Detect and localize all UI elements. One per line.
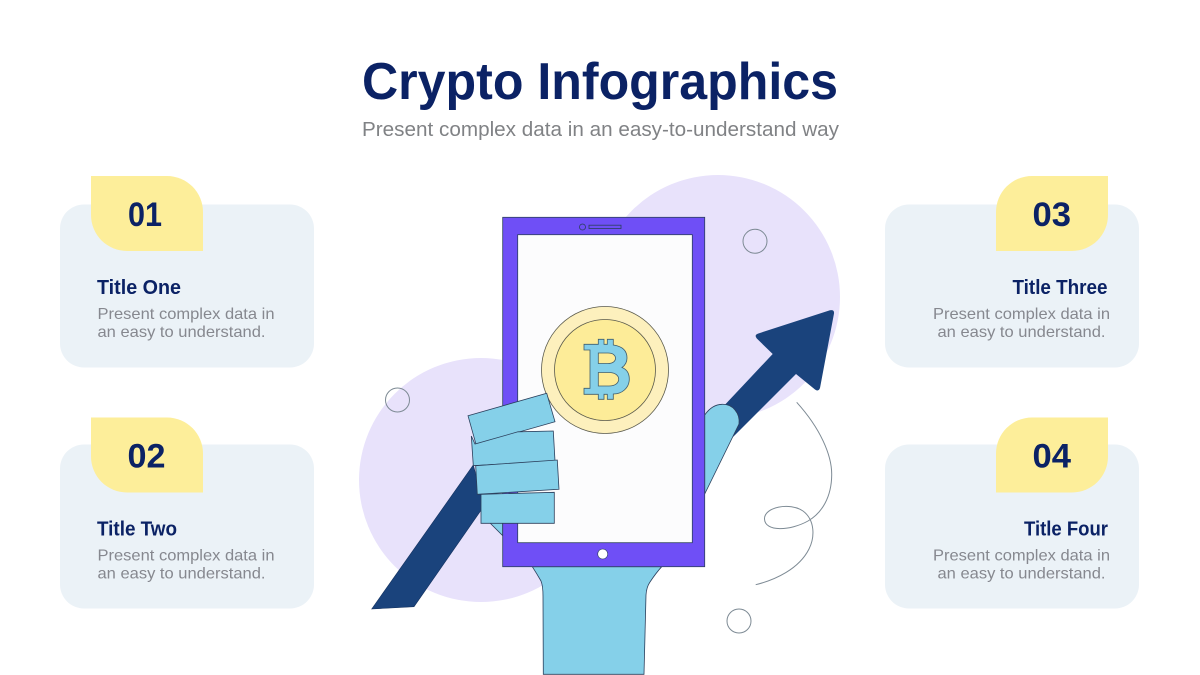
decorative ring: top right <box>743 229 767 253</box>
decorative swirl line <box>756 402 832 585</box>
number badge 02: 02 <box>128 438 166 476</box>
icon: bitcoin symbol <box>584 339 629 399</box>
number badge 01: 01 <box>128 196 162 234</box>
heading: Title Three: Title Three <box>1012 277 1108 299</box>
panel: card 04 <box>885 418 1139 608</box>
text block: card 01: an easy to understand. <box>98 324 266 341</box>
number badge 01 <box>91 176 203 251</box>
panel: card 01 <box>60 176 314 368</box>
text block: card 02 <box>98 548 274 582</box>
illustration: hand holding phone with bitcoin and rising arrow <box>359 175 840 674</box>
phone home button <box>598 549 608 559</box>
finger 2 <box>471 431 555 466</box>
text block: card 02: an easy to understand. <box>98 566 266 582</box>
text block: card 01: Present complex data in <box>98 306 274 323</box>
back hand: thumb and palm behind phone <box>705 404 739 494</box>
arrow: rising trend, tail <box>372 465 484 609</box>
number badge 04: 04 <box>1032 438 1071 476</box>
phone body <box>503 217 705 567</box>
heading: Title Four: Title Four <box>1024 518 1108 540</box>
palm sliver <box>490 523 503 536</box>
finger 3 <box>476 460 559 494</box>
phone camera <box>580 224 586 230</box>
number badge 04 <box>996 418 1108 492</box>
text block: card 01 <box>98 306 274 341</box>
background circle: upper right <box>596 175 840 419</box>
title: Crypto Infographics <box>362 53 838 111</box>
subtitle: Present complex data in an easy-to-understand way <box>362 119 839 141</box>
bitcoin coin <box>542 306 668 434</box>
text block: card 03: Present complex data in <box>933 306 1110 323</box>
forearm <box>532 567 662 674</box>
text block: card 02: Present complex data in <box>98 548 274 564</box>
heading: Title Two: Title Two <box>97 518 177 540</box>
finger 1 <box>468 393 555 444</box>
text block: card 04 <box>933 548 1110 582</box>
phone screen <box>518 235 692 543</box>
number badge 03: 03 <box>1032 196 1071 234</box>
text block: card 04: Present complex data in <box>933 548 1110 564</box>
panel: card 03 <box>885 176 1139 368</box>
background circle: lower left <box>359 358 603 602</box>
phone speaker <box>589 225 621 228</box>
number badge 02 <box>91 418 203 492</box>
arrow: rising trend, head <box>720 310 834 440</box>
number badge 03 <box>996 176 1108 251</box>
text block: card 03 <box>933 306 1110 341</box>
finger 4 <box>481 492 554 523</box>
decorative ring: bottom right <box>727 609 751 633</box>
text block: card 04: an easy to understand. <box>938 566 1106 582</box>
decorative ring: left <box>386 388 410 412</box>
heading: Title One: Title One <box>97 277 181 299</box>
panel: card 02 <box>60 418 314 608</box>
text block: card 03: an easy to understand. <box>938 324 1106 341</box>
